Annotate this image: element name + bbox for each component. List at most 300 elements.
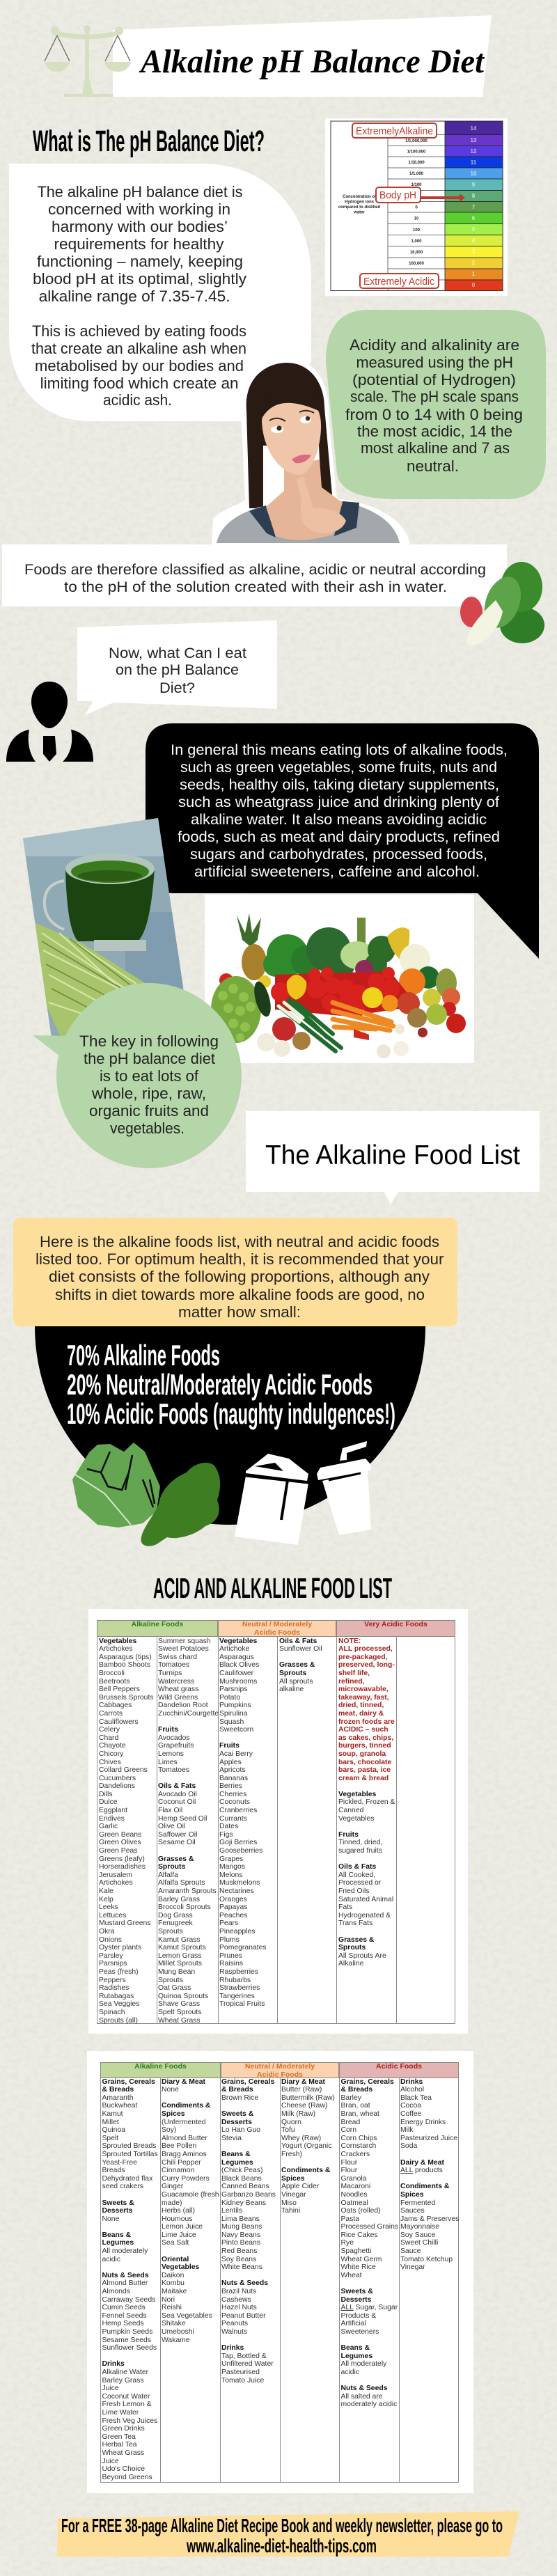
column: alkaline grains, nuts, drinks: Barley Grass — [102, 2377, 144, 2385]
icon: milk carton — [235, 1454, 308, 1545]
column: alkaline vegetables: Peas (fresh) — [99, 1968, 139, 1976]
panel: pH scale chart: compared to distilled — [338, 205, 381, 210]
column: alkaline grains, nuts, drinks: Green Tea — [102, 2433, 136, 2441]
column: acidic grains, sweets, beans, nuts: Barley — [341, 2094, 361, 2102]
column: alkaline grains, nuts, drinks: Cumin Seeds — [102, 2304, 146, 2311]
column: alkaline vegetables: Kelp — [99, 1896, 113, 1903]
header: acidic foods: Acidic Foods — [376, 2062, 422, 2071]
header: neutral foods: Acidic Foods — [254, 1628, 300, 1637]
column: alkaline meat, condiments, vegetables: Chili Pepper — [162, 2159, 201, 2167]
column: neutral dairy and condiments: Spices — [281, 2175, 305, 2183]
column: alkaline grains, nuts, drinks: Sunflower Seeds — [102, 2344, 157, 2352]
panel: diet explanation — [9, 164, 311, 421]
column: alkaline fruits, oils, grasses: Zucchini/Courgette — [158, 1710, 219, 1718]
column: alkaline fruits, oils, grasses: Sprouts — [158, 1977, 183, 1984]
column: alkaline vegetables: Eggplant — [99, 1807, 127, 1814]
column: neutral dairy and condiments: Milk (Raw) — [281, 2110, 315, 2118]
column: neutral grains, beans, nuts, drinks: Navy Beans — [221, 2231, 260, 2239]
column: neutral dairy and condiments: Apple Cider — [281, 2183, 319, 2190]
column: very acidic foods: refined, — [338, 1678, 365, 1686]
column: alkaline grains, nuts, drinks: Almond Butter — [102, 2279, 148, 2287]
column: alkaline meat, condiments, vegetables: Almond Butter — [162, 2135, 207, 2142]
label: extremely acidic: Extremely Acidic — [363, 276, 434, 288]
column: alkaline fruits, oils, grasses: Olive Oil — [158, 1823, 185, 1830]
column: neutral oils and grasses: Oils & Fats — [279, 1638, 317, 1645]
column: very acidic foods: All Sprouts Are — [338, 1952, 386, 1960]
header: very acidic foods — [336, 1620, 455, 1637]
column: neutral grains, beans, nuts, drinks: Pasteurised — [221, 2369, 260, 2376]
column: alkaline grains, nuts, drinks: Nuts & Seeds — [102, 2272, 148, 2279]
column: neutral dairy and condiments: Fresh) — [281, 2151, 302, 2158]
column: alkaline meat, condiments, vegetables: Herbs (all) — [162, 2207, 195, 2215]
panel: diet explanation: The alkaline pH balance diet is — [38, 183, 242, 201]
panel: diet explanation: harmony with our bodies’ — [52, 218, 228, 235]
column: alkaline fruits, oils, grasses: Alfalfa Sprouts — [158, 1879, 205, 1887]
column: very acidic foods: Saturated Animal — [338, 1896, 393, 1903]
column: alkaline meat, condiments, vegetables: Curry Powders — [162, 2175, 210, 2183]
column: alkaline vegetables: Artichokes — [99, 1645, 133, 1653]
panel: pH scale chart — [325, 118, 508, 296]
column: alkaline grains, nuts, drinks: Fresh Veg Juices — [102, 2417, 157, 2425]
column: neutral grains, beans, nuts, drinks: Tomato Juice — [221, 2377, 264, 2385]
column: acidic grains, sweets, beans, nuts: ALL Sugar, Sugar — [341, 2304, 398, 2311]
panel: pH scale chart: water — [353, 210, 365, 214]
column: acidic grains, sweets, beans, nuts: Noodles — [341, 2191, 368, 2199]
column: very acidic foods: Tinned, dried, — [338, 1839, 382, 1846]
column: neutral dairy and condiments: Diary & Meat — [281, 2078, 325, 2086]
panel: food list introduction: matter how small: — [178, 1303, 301, 1321]
column: alkaline vegetables: Greens (leafy) — [99, 1855, 145, 1863]
footer call to action: www.alkaline-diet-health-tips.com — [186, 2535, 377, 2557]
column: alkaline grains, nuts, drinks: Juice — [102, 2458, 119, 2465]
column: neutral dairy and condiments — [281, 2078, 335, 2215]
column: neutral grains, beans, nuts, drinks: Peanuts — [221, 2320, 248, 2327]
column: alkaline grains, nuts, drinks: Yeast-Free — [102, 2159, 137, 2167]
header: neutral foods: Neutral / Moderately — [242, 1620, 312, 1628]
column: neutral vegetables and fruits: Cranberries — [219, 1807, 257, 1814]
column: neutral vegetables and fruits: Apricots — [219, 1766, 246, 1774]
column: neutral grains, beans, nuts, drinks: (Chick Peas) — [221, 2167, 262, 2174]
column: acidic grains, sweets, beans, nuts: All salted are — [341, 2393, 383, 2401]
column: alkaline fruits, oils, grasses: Shave Grass — [158, 2000, 200, 2008]
column: alkaline fruits, oils, grasses: Grapefruits — [158, 1742, 194, 1750]
callout: key to pH balance diet: is to eat lots of — [100, 1067, 199, 1085]
column: alkaline grains, nuts, drinks: & Breads — [102, 2086, 134, 2094]
column: alkaline fruits, oils, grasses: Wheat grass — [158, 1686, 198, 1693]
panel: acidity and alkalinity: Acidity and alkalinity are — [350, 336, 519, 354]
column: neutral vegetables and fruits: Peaches — [219, 1912, 247, 1919]
column: alkaline meat, condiments, vegetables: Umeboshi — [162, 2328, 194, 2336]
panel: black general advice bubble: such as green vegetables, some fruits, nuts and — [180, 759, 497, 776]
panel: acidity and alkalinity: most alkaline and 7 as — [361, 439, 510, 457]
column: alkaline fruits, oils, grasses: Kamut Sprouts — [158, 1944, 206, 1951]
column: very acidic foods: soup, granola — [338, 1750, 386, 1758]
table one: acid and alkaline food list — [88, 1609, 468, 2034]
column: acidic drinks, dairy, condiments: Milk — [400, 2126, 413, 2134]
icon: lettuce — [72, 1443, 160, 1527]
column: very acidic foods: pre-packaged, — [338, 1654, 387, 1661]
column: very acidic foods: meat, dairy & — [338, 1710, 384, 1718]
column: neutral dairy and condiments: Quorn — [281, 2119, 301, 2126]
column: alkaline fruits, oils, grasses: Sweet Potatoes — [158, 1645, 209, 1653]
column: alkaline fruits, oils, grasses: Saffower Oil — [158, 1831, 197, 1839]
column: neutral grains, beans, nuts, drinks: Canned Beans — [221, 2183, 269, 2190]
column: neutral vegetables and fruits: Pineapples — [219, 1928, 255, 1935]
column: neutral vegetables and fruits: Goji Berries — [219, 1839, 257, 1846]
panel: pH scale chart: 0 — [472, 282, 476, 288]
column: neutral grains, beans, nuts, drinks: Mung Beans — [221, 2223, 262, 2231]
column: neutral oils and grasses: Sunflower Oil — [279, 1645, 322, 1653]
column: acidic grains, sweets, beans, nuts: Beans & — [341, 2344, 370, 2352]
column: neutral grains, beans, nuts, drinks: Lentils — [221, 2207, 242, 2215]
column: very acidic foods: Fruits — [338, 1831, 359, 1839]
column: acidic drinks, dairy, condiments: Cocoa — [400, 2102, 421, 2110]
panel: black general advice bubble: seeds, healthy oils, taking dietary supplements, — [180, 776, 499, 793]
panel: pH scale chart: 2 — [472, 260, 476, 266]
panel: pH scale chart: 6 — [472, 215, 476, 221]
panel: pH scale chart: 3 — [472, 249, 476, 255]
column: neutral vegetables and fruits: Mangos — [219, 1863, 245, 1871]
panel: pH scale chart: 10,000 — [410, 251, 423, 255]
column: alkaline vegetables: Oyster plants — [99, 1944, 141, 1951]
column: neutral grains, beans, nuts, drinks: Legumes — [221, 2159, 253, 2167]
column: acidic drinks, dairy, condiments: ALL products — [400, 2167, 443, 2174]
column: very acidic foods — [338, 1638, 395, 1968]
column: alkaline grains, nuts, drinks: Dehydrated flax — [102, 2175, 152, 2183]
callout: key to pH balance diet: The key in following — [79, 1032, 219, 1050]
column: alkaline grains, nuts, drinks: Hemp Seeds — [102, 2320, 144, 2327]
circle: proportions — [35, 1326, 425, 1525]
column: neutral oils and grasses: All sprouts — [279, 1678, 313, 1686]
photo: fruit and vegetables — [205, 895, 474, 1063]
panel: black general advice bubble: sugars and carbohydrates, processed foods, — [190, 846, 487, 863]
column: neutral vegetables and fruits: Currants — [219, 1815, 247, 1823]
panel: acidity and alkalinity: from 0 to 14 with 0 being — [345, 406, 523, 423]
panel: diet explanation: concerned with working in — [48, 201, 230, 218]
column: alkaline vegetables: Peppers — [99, 1977, 126, 1984]
column: neutral vegetables and fruits: Rhubarbs — [219, 1977, 251, 1984]
column: neutral vegetables and fruits: Fruits — [219, 1742, 240, 1750]
header: alkaline foods — [97, 1620, 218, 1637]
column: acidic drinks, dairy, condiments: Tomato Ketchup — [400, 2256, 453, 2263]
column: acidic grains, sweets, beans, nuts: Legumes — [341, 2353, 372, 2360]
column: alkaline fruits, oils, grasses: Quinoa Sprouts — [158, 1993, 208, 2000]
panel: foods classified — [2, 544, 507, 606]
column: neutral dairy and condiments: Whey (Raw) — [281, 2135, 321, 2142]
column: neutral grains, beans, nuts, drinks: White Beans — [221, 2263, 262, 2271]
column: alkaline vegetables: Dills — [99, 1791, 113, 1798]
header: neutral foods: Acidic Foods — [257, 2071, 303, 2079]
panel: pH scale chart: 11 — [471, 159, 477, 166]
column: neutral vegetables and fruits: Parsnips — [219, 1686, 247, 1693]
column: neutral grains, beans, nuts, drinks: Garbanzo Beans — [221, 2191, 276, 2199]
column: neutral grains, beans, nuts, drinks: Sweets & — [221, 2110, 253, 2118]
column: acidic grains, sweets, beans, nuts: Flour — [341, 2159, 357, 2167]
column: acidic grains, sweets, beans, nuts: Processed Grains — [341, 2223, 398, 2231]
callout: key to pH balance diet: vegetables. — [110, 1120, 185, 1137]
column: acidic grains, sweets, beans, nuts: All moderately — [341, 2360, 386, 2368]
column: alkaline vegetables: Green Olives — [99, 1839, 141, 1846]
column: alkaline grains, nuts, drinks: seed crakers — [102, 2183, 143, 2190]
column: alkaline fruits, oils, grasses: Summer squash — [158, 1638, 211, 1645]
panel: foods classified: Foods are therefore classified as alkaline, acidic or neutral according — [24, 561, 486, 578]
column: acidic grains, sweets, beans, nuts: Bran, oat — [341, 2102, 370, 2110]
icon: takeaway cup — [317, 1441, 371, 1535]
label: extremely alkaline: ExtremelyAlkaline — [356, 125, 433, 137]
column: alkaline fruits, oils, grasses: Kamut Grass — [158, 1936, 201, 1944]
column: very acidic foods: as cakes, chips, — [338, 1734, 393, 1742]
column: neutral vegetables and fruits: Cherries — [219, 1791, 246, 1798]
column: neutral vegetables and fruits: Berries — [219, 1782, 242, 1790]
header: neutral foods — [221, 2062, 339, 2078]
column: alkaline meat, condiments, vegetables: made) — [162, 2199, 182, 2207]
column: alkaline grains, nuts, drinks: Amaranth — [102, 2094, 134, 2102]
column: alkaline vegetables: Brussels Sprouts — [99, 1694, 154, 1702]
column: alkaline vegetables: Dulce — [99, 1798, 118, 1806]
column: alkaline fruits, oils, grasses: Mung Bean — [158, 1968, 195, 1976]
header: neutral foods — [218, 1620, 336, 1637]
panel: black general advice bubble: such as wheatgrass juice and drinking plenty of — [178, 794, 499, 810]
column: alkaline vegetables: Rutabagas — [99, 1993, 134, 2000]
column: alkaline fruits, oils, grasses: Wild Greens — [158, 1694, 198, 1702]
column: alkaline vegetables: Vegetables — [99, 1638, 136, 1645]
column: alkaline vegetables: Mustard Greens — [99, 1919, 150, 1927]
column: acidic grains, sweets, beans, nuts: Grains, Cereals — [341, 2078, 394, 2086]
column: neutral oils and grasses — [279, 1638, 322, 1693]
column: very acidic foods: Oils & Fats — [338, 1863, 376, 1871]
panel: acidity and alkalinity: scale. The pH scale spans — [350, 388, 519, 405]
column: alkaline grains, nuts, drinks: Legumes — [102, 2239, 134, 2247]
footer call to action — [57, 2511, 519, 2557]
column: neutral vegetables and fruits: Sweetcorn — [219, 1726, 253, 1734]
column: acidic grains, sweets, beans, nuts: Sweeteners — [341, 2328, 379, 2336]
column: alkaline meat, condiments, vegetables: Bragg Aminos — [162, 2151, 207, 2158]
column: alkaline grains, nuts, drinks: Millet — [102, 2119, 119, 2126]
panel: pH scale chart: 1/1,000 — [409, 172, 424, 176]
column: alkaline fruits, oils, grasses: Grasses & — [158, 1855, 194, 1863]
column: alkaline vegetables: Asparagus (tips) — [99, 1654, 152, 1661]
column: alkaline grains, nuts, drinks: Desserts — [102, 2207, 132, 2215]
column: acidic drinks, dairy, condiments: Soy Sauce — [400, 2231, 435, 2239]
panel: acidity and alkalinity: the most acidic, 14 the — [357, 423, 512, 440]
column: alkaline grains, nuts, drinks: Wheat Grass — [102, 2449, 144, 2457]
panel: acidity and alkalinity: neutral. — [407, 457, 459, 475]
column: neutral grains, beans, nuts, drinks: Brown Rice — [221, 2094, 258, 2102]
column: neutral grains, beans, nuts, drinks: Stevia — [221, 2135, 242, 2142]
column: acidic drinks, dairy, condiments: Sauces — [400, 2207, 425, 2215]
column: alkaline grains, nuts, drinks: Beyond Greens — [102, 2474, 152, 2481]
column: neutral dairy and condiments: Tofu — [281, 2126, 295, 2134]
column: alkaline meat, condiments, vegetables: Condiments & — [162, 2102, 210, 2110]
column: acidic grains, sweets, beans, nuts: Corn — [341, 2126, 356, 2134]
column: alkaline meat, condiments, vegetables: Spices — [162, 2110, 185, 2118]
callout: key to pH balance diet: whole, ripe, raw, — [91, 1085, 206, 1102]
column: alkaline fruits, oils, grasses: Dandelion Root — [158, 1702, 208, 1709]
column: alkaline grains, nuts, drinks: Kamut — [102, 2110, 123, 2118]
column: alkaline meat, condiments, vegetables: Daikon — [162, 2272, 184, 2279]
heading: what is the pH balance diet: What is The pH Balance Diet? — [33, 125, 265, 158]
panel: acidity and alkalinity — [326, 310, 546, 499]
column: alkaline vegetables: Cucumbers — [99, 1775, 136, 1782]
column: very acidic foods: bars, chocolate — [338, 1759, 391, 1766]
panel: pH scale chart: 5 — [472, 226, 476, 233]
column: very acidic foods: takeaway, fast, — [338, 1694, 389, 1702]
column: alkaline grains, nuts, drinks: Carraway Seeds — [102, 2296, 155, 2304]
panel: pH scale chart: 1/100,000 — [407, 150, 426, 155]
column: alkaline grains, nuts, drinks: Beans & — [102, 2231, 131, 2239]
column: acidic grains, sweets, beans, nuts: acidic — [341, 2369, 359, 2376]
column: neutral dairy and condiments: Vinegar — [281, 2191, 306, 2199]
panel: food list introduction: shifts in diet towards more alkaline foods are good, no — [55, 1286, 425, 1303]
column: neutral vegetables and fruits: Papayas — [219, 1903, 247, 1911]
column: alkaline meat, condiments, vegetables: Vegetables — [162, 2263, 199, 2271]
column: neutral oils and grasses: Sprouts — [279, 1670, 306, 1677]
column: alkaline grains, nuts, drinks: Coconut Water — [102, 2393, 150, 2401]
column: acidic grains, sweets, beans, nuts: Bran, wheat — [341, 2110, 379, 2118]
column: very acidic foods: All Cooked, — [338, 1871, 375, 1879]
column: neutral grains, beans, nuts, drinks: Lima Beans — [221, 2215, 260, 2223]
column: alkaline grains, nuts, drinks: Fennel Seeds — [102, 2312, 147, 2320]
column: acidic grains, sweets, beans, nuts: Bread — [341, 2119, 360, 2126]
column: acidic grains, sweets, beans, nuts: moderately acidic — [341, 2401, 397, 2408]
column: neutral grains, beans, nuts, drinks: Pinto Beans — [221, 2239, 260, 2247]
column: alkaline meat, condiments, vegetables: Guacamole (fresh — [162, 2191, 219, 2199]
column: alkaline grains, nuts, drinks: Udo's Choice — [102, 2465, 145, 2473]
panel: pH scale chart: 1 — [472, 271, 476, 277]
column: very acidic foods: Pickled, Frozen & — [338, 1798, 395, 1806]
column: alkaline vegetables: Leeks — [99, 1903, 118, 1911]
column: acidic grains, sweets, beans, nuts: Oatmeal — [341, 2199, 368, 2207]
column: alkaline vegetables: Dandelions — [99, 1782, 135, 1790]
panel: pH scale chart: Hydrogen ions — [345, 201, 375, 205]
panel: pH scale chart: 10 — [414, 217, 419, 221]
column: acidic grains, sweets, beans, nuts: & Breads — [341, 2086, 372, 2094]
column: alkaline vegetables: Jerusalem — [99, 1871, 132, 1879]
column: alkaline vegetables: Cauliflowers — [99, 1718, 139, 1726]
column: alkaline meat, condiments, vegetables: Nori — [162, 2296, 175, 2304]
column: alkaline fruits, oils, grasses: Dog Grass — [158, 1912, 193, 1919]
column: alkaline grains, nuts, drinks: Juice — [102, 2385, 119, 2392]
column: acidic grains, sweets, beans, nuts: Oats (rolled) — [341, 2207, 381, 2215]
column: acidic drinks, dairy, condiments: Fermented — [400, 2199, 435, 2207]
icon: tomato and bok choy — [460, 562, 544, 646]
panel: pH scale chart: 14 — [471, 125, 477, 132]
column: alkaline meat, condiments, vegetables: Lemon Juice — [162, 2223, 203, 2231]
column: neutral grains, beans, nuts, drinks — [221, 2078, 276, 2385]
column: neutral grains, beans, nuts, drinks: Desserts — [221, 2119, 252, 2126]
speech bubble: what can I eat: Diet? — [159, 680, 195, 696]
column: alkaline meat, condiments, vegetables: Wakame — [162, 2337, 190, 2344]
column: alkaline meat, condiments, vegetables: Houmous — [162, 2215, 192, 2223]
column: alkaline vegetables: Carrots — [99, 1710, 123, 1718]
column: alkaline vegetables: Sprouts (all) — [99, 2016, 138, 2025]
icon: balance scale — [45, 25, 131, 97]
column: acidic grains, sweets, beans, nuts: Desserts — [341, 2296, 371, 2304]
column: very acidic foods: Fats — [338, 1903, 352, 1911]
column: neutral vegetables and fruits: Figs — [219, 1831, 233, 1839]
column: neutral vegetables and fruits: Prunes — [219, 1952, 242, 1960]
panel: pH scale chart: 100,000 — [409, 262, 425, 266]
heading: the alkaline food list: The Alkaline Food List — [265, 1140, 520, 1170]
column: acidic drinks, dairy, condiments: Coffee — [400, 2110, 421, 2118]
column: alkaline vegetables: Beetroots — [99, 1678, 130, 1686]
panel: diet explanation: functioning – namely, keeping — [37, 253, 243, 270]
speech bubble: what can I eat: on the pH Balance — [116, 661, 239, 678]
concentration column — [388, 135, 445, 290]
column: very acidic foods: Alkaline — [338, 1960, 363, 1968]
column: very acidic foods: microwavable, — [338, 1686, 389, 1693]
column: acidic grains, sweets, beans, nuts: Sweets & — [341, 2288, 373, 2295]
column: neutral vegetables and fruits: Nectarines — [219, 1887, 254, 1895]
column: very acidic foods: shelf life, — [338, 1670, 370, 1677]
column: very acidic foods: Hydrogenated & — [338, 1912, 391, 1919]
column: acidic drinks, dairy, condiments: Energy Drinks — [400, 2119, 446, 2126]
column: neutral vegetables and fruits: Pears — [219, 1919, 238, 1927]
column: acidic grains, sweets, beans, nuts: Crackers — [341, 2151, 370, 2158]
column: neutral grains, beans, nuts, drinks: Beans & — [221, 2151, 251, 2158]
icon: businessman — [6, 682, 93, 762]
column: neutral vegetables and fruits: Strawberries — [219, 1984, 260, 1992]
column: alkaline vegetables: Sea Veggies — [99, 2000, 139, 2008]
column: neutral grains, beans, nuts, drinks: Tap, Bottled & — [221, 2353, 267, 2360]
column: alkaline vegetables: Radishes — [99, 1984, 129, 1992]
pH colour scale — [445, 121, 503, 291]
column: alkaline vegetables: Kale — [99, 1887, 113, 1895]
column: alkaline meat, condiments, vegetables: Shitake — [162, 2320, 186, 2327]
column: very acidic foods: cream & bread — [338, 1775, 389, 1782]
callout: key to pH balance diet: organic fruits and — [89, 1102, 209, 1120]
column: alkaline vegetables: Green Beans — [99, 1831, 141, 1839]
header: alkaline foods — [100, 2062, 221, 2078]
column: very acidic foods: Fried Oils — [338, 1887, 369, 1895]
column: neutral grains, beans, nuts, drinks: Red Beans — [221, 2247, 257, 2255]
column: neutral grains, beans, nuts, drinks: Black Beans — [221, 2175, 262, 2183]
column: alkaline meat, condiments, vegetables: Sea Vegetables — [162, 2312, 212, 2320]
column: very acidic foods: preserved, long- — [338, 1661, 395, 1669]
column: very acidic foods: Vegetables — [338, 1791, 376, 1798]
panel: pH scale chart: 100 — [413, 228, 421, 233]
column: neutral vegetables and fruits — [219, 1638, 267, 2008]
column: very acidic foods: frozen foods are — [338, 1718, 395, 1726]
column: alkaline vegetables: Endives — [99, 1815, 125, 1823]
column: neutral grains, beans, nuts, drinks: Unfiltered Water — [221, 2360, 274, 2368]
column: neutral vegetables and fruits: Pomegranates — [219, 1944, 267, 1951]
column: very acidic foods: sugared fruits — [338, 1847, 382, 1855]
callout: key to pH balance diet: the pH balance diet — [84, 1050, 215, 1067]
column: acidic grains, sweets, beans, nuts: Flour — [341, 2167, 357, 2174]
column: alkaline meat, condiments, vegetables: Soy) — [162, 2126, 176, 2134]
panel: food list introduction: listed too. For optimum health, it is recommended that your — [36, 1250, 444, 1268]
panel: diet explanation: blood pH at its optimal, slightly — [33, 270, 246, 288]
column: alkaline fruits, oils, grasses: Barley Grass — [158, 1896, 200, 1903]
column: neutral vegetables and fruits: Asparagus — [219, 1654, 254, 1661]
heading: the alkaline food list — [246, 1111, 540, 1204]
column: alkaline vegetables: Spinach — [99, 2009, 125, 2016]
column: neutral vegetables and fruits: Apples — [219, 1759, 242, 1766]
column: neutral grains, beans, nuts, drinks: Lo Han Guo — [221, 2126, 260, 2134]
column: alkaline vegetables: Horseradishes — [99, 1863, 146, 1871]
column: very acidic foods: ALL processed, — [338, 1645, 393, 1653]
column: alkaline meat, condiments, vegetables: Cinnamon — [162, 2167, 194, 2174]
header: alkaline foods: Alkaline Foods — [132, 1620, 183, 1628]
panel: pH scale chart: 1/100 — [411, 183, 422, 187]
panel: diet explanation: acidic ash. — [103, 391, 172, 409]
panel: pH scale chart: 10 — [471, 171, 477, 177]
column: acidic grains, sweets, beans, nuts: Rice Cakes — [341, 2231, 378, 2239]
column: alkaline meat, condiments, vegetables: Lime Juice — [162, 2231, 196, 2239]
column: alkaline fruits, oils, grasses: Alfalfa — [158, 1871, 178, 1879]
column: neutral vegetables and fruits: Tangerines — [219, 1993, 255, 2000]
